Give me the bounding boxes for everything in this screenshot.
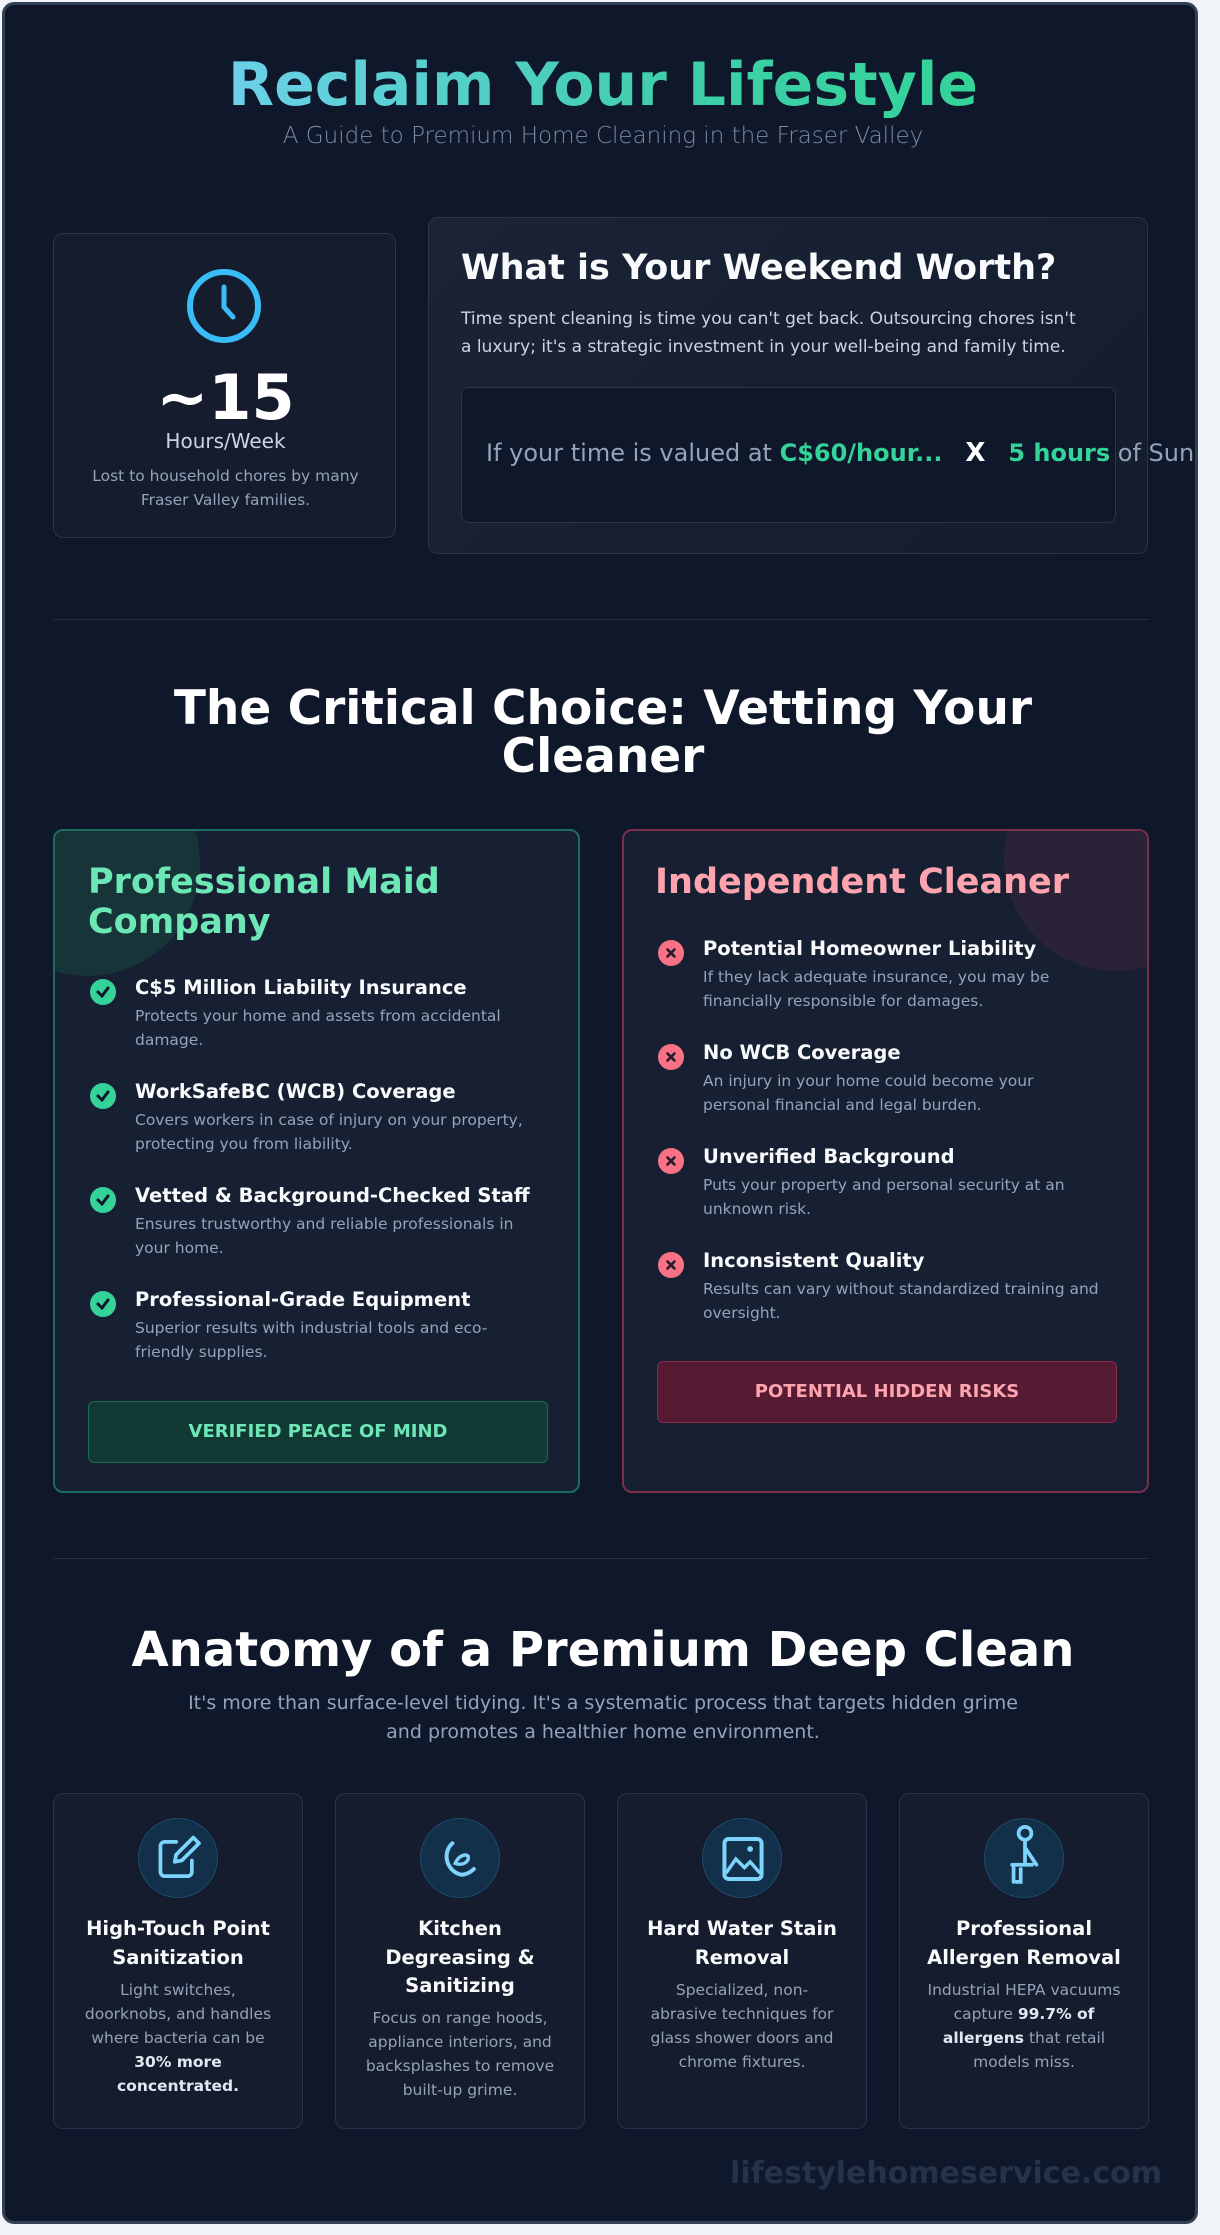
feature card: allergen: Industrial HEPA vacuums capture 99.7% of allergens that retail models miss. <box>928 1981 1120 2071</box>
panel: independent cleaner <box>622 829 1149 1493</box>
risk 3: Puts your property and personal security at an unknown risk. <box>703 1176 1065 1218</box>
icon: clock <box>187 269 261 343</box>
item 4: Professional-Grade Equipment <box>135 1288 470 1311</box>
heading: Professional Maid <box>88 862 440 902</box>
item 2: Covers workers in case of injury on your property, protecting you from liability. <box>135 1111 523 1153</box>
panel: weekend worth <box>428 217 1148 554</box>
panel: hours stat <box>53 233 396 538</box>
item 1 <box>90 976 501 1049</box>
item 1: C$5 Million Liability Insurance <box>135 976 467 999</box>
divider <box>53 1558 1148 1559</box>
heading <box>88 862 440 942</box>
section title: anatomy: Anatomy of a Premium Deep Clean <box>132 1622 1074 1678</box>
feature card: hard water <box>617 1793 867 2129</box>
risk 2: An injury in your home could become your personal financial and legal burden. <box>703 1072 1034 1114</box>
item 3 <box>90 1184 530 1257</box>
title: Reclaim Your Lifestyle <box>228 50 978 120</box>
risk 1 <box>658 937 1049 1010</box>
feature card: kitchen: Focus on range hoods, appliance interiors, and backsplashes to remove built-up grime. <box>366 2009 554 2099</box>
item 4 <box>90 1288 487 1361</box>
badge: potential hidden risks: POTENTIAL HIDDEN RISKS <box>755 1381 1019 1402</box>
paragraph: a luxury; it's a strategic investment in your well-being and family time. <box>461 336 1066 356</box>
badge: potential hidden risks <box>657 1361 1117 1423</box>
risk 1: Potential Homeowner Liability <box>703 937 1036 960</box>
subtitle: A Guide to Premium Home Cleaning in the Fraser Valley <box>283 123 923 149</box>
item 4: Superior results with industrial tools and eco-friendly supplies. <box>135 1319 487 1361</box>
item 3: Ensures trustworthy and reliable professionals in your home. <box>135 1215 513 1257</box>
risk 4 <box>658 1249 1099 1322</box>
icon: edit <box>138 1818 218 1898</box>
item 2: WorkSafeBC (WCB) Coverage <box>135 1080 456 1103</box>
risk 3 <box>658 1145 1065 1218</box>
icon: person <box>984 1818 1064 1898</box>
heading: Company <box>88 902 271 942</box>
item 3: Vetted & Background-Checked Staff <box>135 1184 530 1207</box>
item 2 <box>90 1080 523 1153</box>
icon: drop <box>420 1818 500 1898</box>
feature card: kitchen: Kitchen Degreasing & Sanitizing <box>385 1917 535 1997</box>
risk 1: If they lack adequate insurance, you may be financially responsible for damages. <box>703 968 1049 1010</box>
risk 2 <box>658 1041 1034 1114</box>
risk 2: No WCB Coverage <box>703 1041 901 1064</box>
feature card: allergen <box>899 1793 1149 2129</box>
paragraph <box>460 309 1076 356</box>
footer brand: lifestylehomeservice.com <box>730 2156 1162 2191</box>
risk 3: Unverified Background <box>703 1145 955 1168</box>
feature card: hard water: Hard Water Stain Removal <box>647 1917 837 1968</box>
stat caption: Lost to household chores by many Fraser Valley families. <box>92 467 359 509</box>
panel: professional maid company <box>53 829 580 1493</box>
section title: critical choice: The Critical Choice: Vetting Your Cleaner <box>174 681 1032 784</box>
item 1: Protects your home and assets from accidental damage. <box>135 1007 501 1049</box>
divider <box>53 619 1148 620</box>
feature card: kitchen <box>335 1793 585 2129</box>
risk 4: Inconsistent Quality <box>703 1249 924 1272</box>
feature card: allergen: Professional Allergen Removal <box>927 1917 1121 1968</box>
stat number: ~15 <box>156 361 295 434</box>
section subtitle: It's more than surface-level tidying. It's a systematic process that targets hidden grime and promotes a healthier home environment. <box>188 1692 1018 1743</box>
paragraph: Time spent cleaning is time you can't get back. Outsourcing chores isn't <box>461 309 1076 329</box>
feature card: hard water: Specialized, non-abrasive techniques for glass shower doors and chrome fixtures. <box>651 1981 833 2071</box>
icon: image <box>702 1818 782 1898</box>
badge: verified peace of mind: VERIFIED PEACE OF MIND <box>189 1421 447 1442</box>
heading: What is Your Weekend Worth? <box>461 248 1056 288</box>
feature card: high-touch: High-Touch Point Sanitization <box>86 1917 270 1968</box>
calculation box <box>461 387 1116 523</box>
heading: Independent Cleaner <box>655 862 1069 902</box>
feature card: high-touch: Light switches, doorknobs, and handles where bacteria can be 30% more concentrated. <box>85 1981 271 2095</box>
feature card: high-touch <box>53 1793 303 2129</box>
badge: verified peace of mind <box>88 1401 548 1463</box>
stat label: Hours/Week <box>165 429 286 453</box>
risk 4: Results can vary without standardized training and oversight. <box>703 1280 1099 1322</box>
